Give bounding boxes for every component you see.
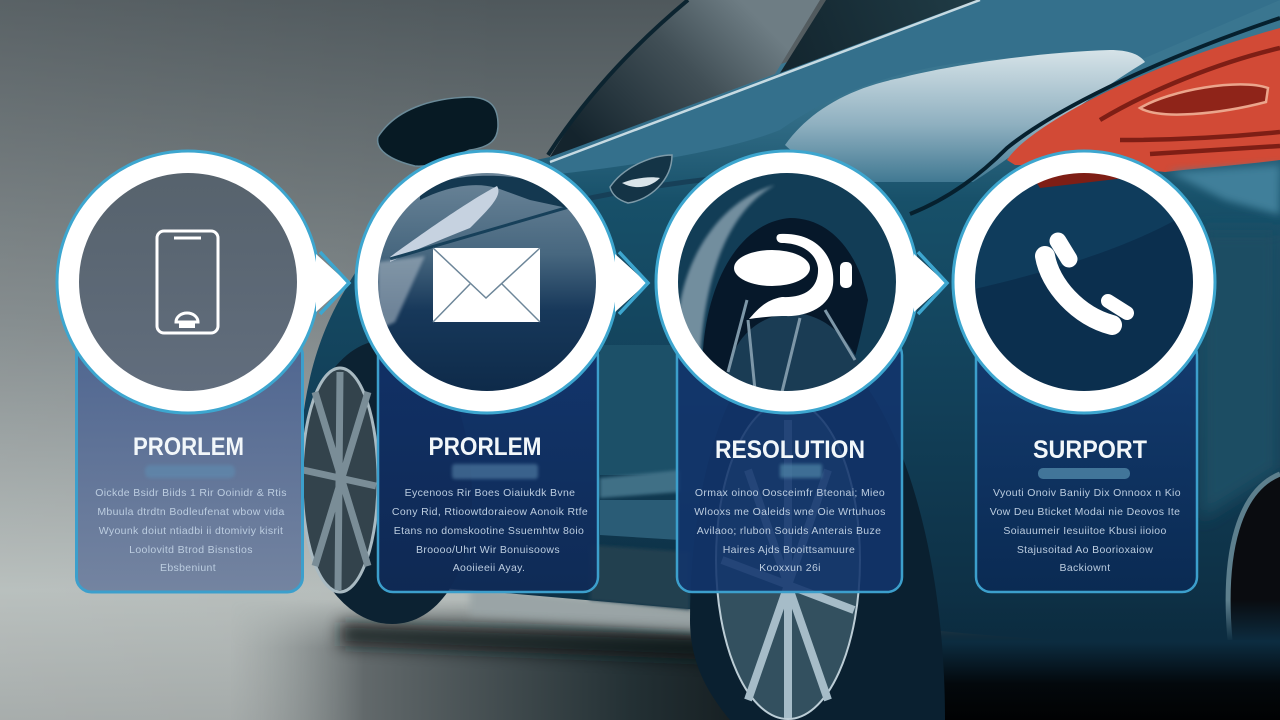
arrow: step 3 to 4	[914, 252, 947, 314]
icon: headset speech bubble	[734, 234, 852, 319]
a-pillar line	[548, 0, 688, 155]
body text: step 4	[990, 487, 1181, 574]
dark roofline	[420, 176, 566, 207]
body text: step 4: Vyouti Onoiv Baniiy Dix Onnoox n Kio	[993, 487, 1181, 499]
heading: step 1: PRORLEM	[133, 433, 244, 461]
tail light inner lens	[1140, 84, 1268, 115]
accent bar: step 4	[1038, 468, 1130, 479]
badge ring: step 4	[964, 162, 1204, 402]
badge outline: step 2	[356, 151, 618, 413]
body text: step 2: Eycenoos Rir Boes Oiaiukdk Bvne	[405, 487, 575, 499]
icon: envelope	[433, 248, 540, 322]
car body	[300, 0, 1280, 644]
step 4: support	[953, 151, 1215, 592]
body text: step 2: Cony Rid, Rtioowtdoraieow Aonoik Rtfe	[392, 506, 588, 518]
sill dark tone	[590, 545, 690, 610]
body text: step 1: Loolovitd Btrod Bisnstios	[129, 544, 253, 556]
body text: step 1: Wyounk doiut ntiadbi ii dtomiviy kisrit	[99, 525, 283, 537]
front wheel	[300, 340, 472, 624]
wheel spokes	[728, 300, 855, 392]
side window front	[550, 0, 820, 157]
arrow: step 2 to 3	[615, 252, 648, 314]
shoulder highlight	[785, 50, 1145, 182]
rear wheel	[690, 340, 945, 720]
arrow: step 1 to 2	[316, 252, 349, 314]
body text: step 1: Ebsbeniunt	[160, 562, 216, 574]
dark wheel arch	[703, 218, 868, 374]
panel: step 3	[677, 340, 902, 592]
exhaust highlight	[1228, 474, 1280, 640]
tail light stripes	[1100, 48, 1280, 154]
badge outline: step 3	[656, 151, 918, 413]
body text: step 2	[392, 487, 588, 574]
heading: step 3: RESOLUTION	[715, 436, 865, 464]
heading: step 4: SURPORT	[1033, 436, 1147, 464]
upper body highlight band	[550, 0, 1280, 175]
circle artwork: step 2	[378, 173, 596, 391]
rear bumper tone	[1200, 230, 1280, 520]
arch highlight	[679, 184, 774, 350]
lamp reflection	[378, 256, 425, 330]
accent bar: step 3	[780, 464, 822, 478]
step 3: resolution	[656, 151, 918, 592]
step 2: problem	[356, 151, 618, 592]
body text: step 4: Backiownt	[1059, 562, 1111, 574]
sill lower tone	[600, 500, 680, 540]
reflection streak	[390, 186, 498, 262]
icon: smartphone	[157, 231, 218, 333]
upper tone	[975, 179, 1174, 288]
badge outline: step 1	[57, 151, 319, 413]
floor shadow	[255, 604, 1040, 720]
exhaust recess	[1228, 474, 1280, 640]
body text: step 4: Stajusoitad Ao Boorioxaiow	[1017, 544, 1153, 556]
body text: step 1: Mbuula dtrdtn Bodleufenat wbow vida	[97, 506, 285, 518]
body text: step 2: Broooo/Uhrt Wir Bonuisoows	[416, 544, 560, 556]
lower right shadow	[930, 600, 1280, 720]
body text: step 2: Aooiieeii Ayay.	[453, 562, 525, 574]
lower door panel	[600, 345, 680, 475]
door crease	[560, 173, 780, 205]
accent bar: step 1	[145, 465, 235, 478]
body text: step 3: Ormax oinoo Oosceimfr Bteonai; Mieo	[695, 487, 885, 499]
mirror	[378, 97, 498, 166]
body text: step 3: Wlooxs me Oaleids wne Oie Wrtuhuos	[694, 506, 886, 518]
panel: step 2	[378, 340, 598, 592]
body text: step 1: Oickde Bsidr Biids 1 Rir Ooinidr & Rtis	[95, 487, 287, 499]
body text: step 2: Etans no domskootine Ssuemhtw 8oio	[394, 525, 584, 537]
body text: step 3: Kooxxun 26i	[759, 562, 821, 574]
badge outline: step 4	[953, 151, 1215, 413]
body text: step 3: Haires Ajds Booittsamuure	[723, 544, 855, 556]
body crease	[390, 206, 568, 260]
circle artwork: step 3	[678, 173, 896, 391]
badge ring: step 3	[667, 162, 907, 402]
under-car shadow	[340, 622, 720, 660]
heading: step 2: PRORLEM	[428, 433, 542, 461]
tail light upper edge	[910, 18, 1280, 214]
sill band	[600, 470, 680, 498]
car illustration	[300, 0, 1280, 720]
rear haunch highlight	[1170, 165, 1280, 215]
gleam under sill	[470, 585, 705, 634]
circle artwork: step 4	[975, 173, 1193, 391]
body text: step 3: Avilaoo; rlubon Souids Anterais Buze	[697, 525, 881, 537]
body text: step 3	[694, 487, 886, 574]
body text: step 1	[95, 487, 287, 574]
icon: telephone handset	[1045, 241, 1127, 325]
circle badge: step 1	[68, 162, 308, 402]
tail light	[910, 18, 1280, 214]
door handle	[610, 155, 672, 203]
side window rear	[780, 0, 976, 73]
body text: step 4: Soiauumeir Iesuiitoe Kbusi iioioo	[1003, 525, 1167, 537]
panel: step 4	[976, 340, 1197, 592]
wheel interior	[728, 314, 856, 391]
badge ring: step 2	[367, 162, 607, 402]
window chrome line	[550, 0, 980, 162]
body text: step 4: Vow Deu Bticket Modai nie Deovos Ite	[990, 506, 1180, 518]
accent bar: step 2	[452, 464, 538, 479]
step 1: problem	[57, 151, 319, 592]
panel: step 1	[76, 340, 302, 592]
tail light reflection	[1037, 173, 1120, 188]
